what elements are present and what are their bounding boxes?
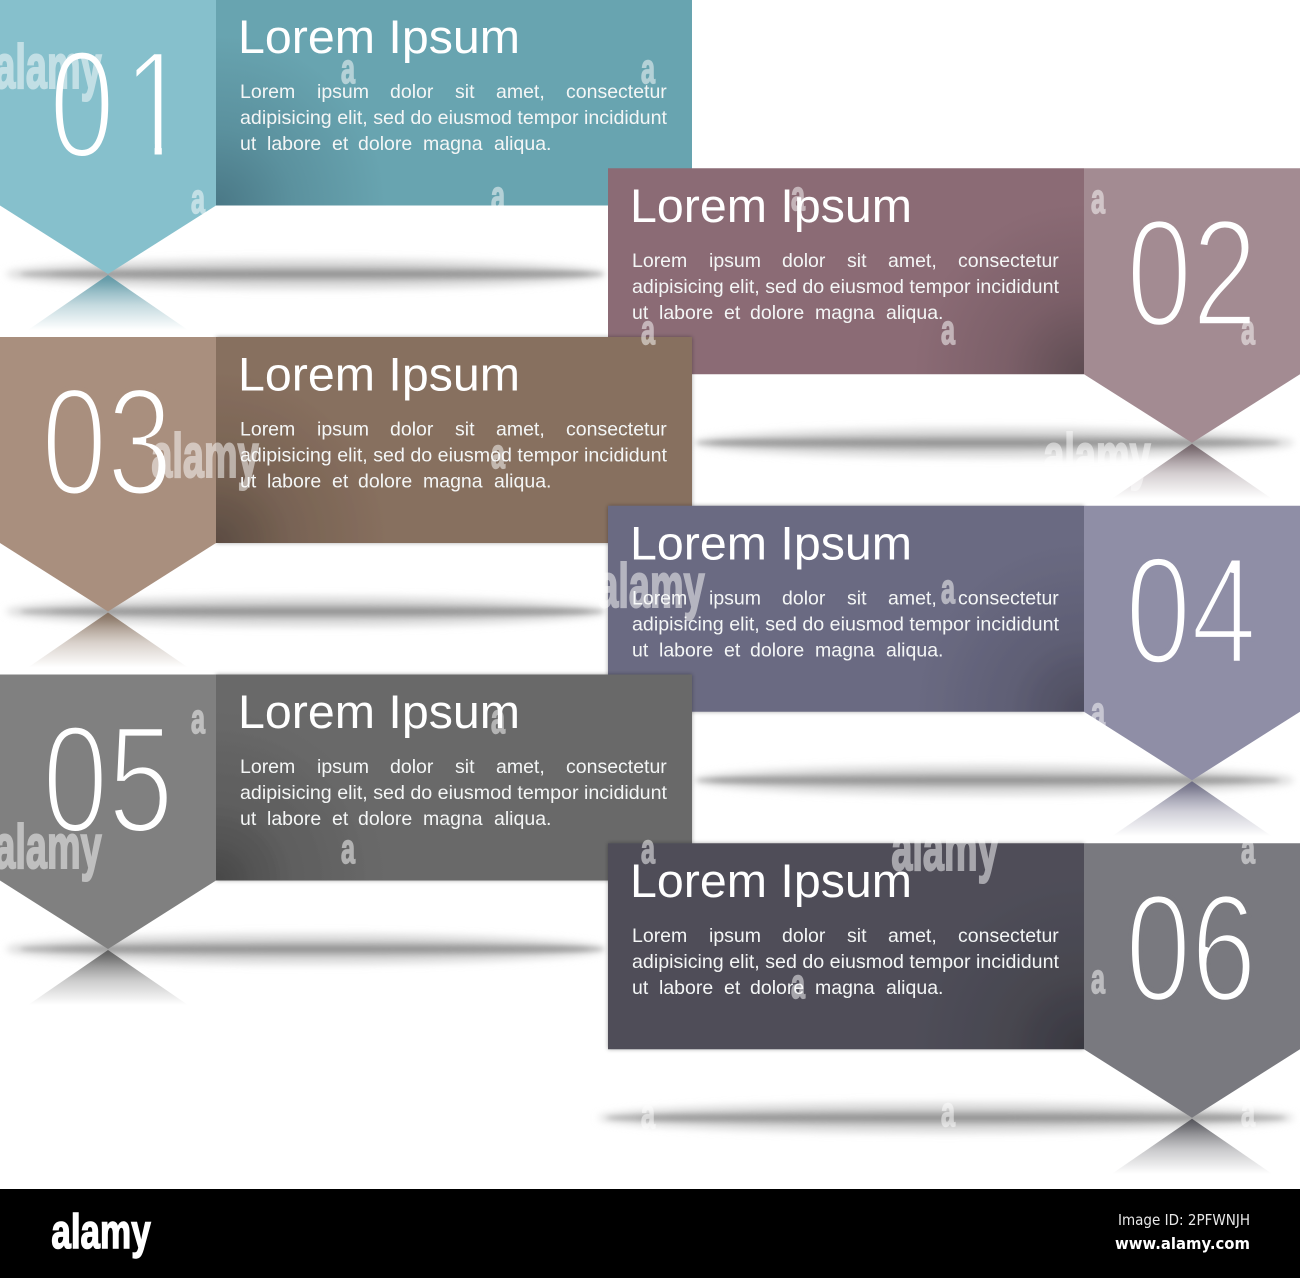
footer logo: alamy	[51, 1205, 151, 1258]
watermarks: small a marks: a	[341, 827, 356, 873]
body text 03: dolore	[358, 470, 412, 492]
watermarks: large alamy: alamy	[891, 814, 999, 883]
text box 02	[608, 168, 1084, 374]
reflection 05	[28, 950, 188, 1005]
arrow ribbon 02	[1084, 168, 1300, 443]
body text 05: labore	[267, 808, 321, 830]
body text 03: et	[332, 470, 349, 492]
arrow ribbon 05	[0, 674, 216, 949]
body text 02: consectetur	[958, 250, 1059, 272]
watermarks: small a marks: a	[491, 174, 506, 220]
reflection 03	[28, 612, 188, 668]
body text 03: Lorem	[240, 418, 295, 440]
watermarks: small a marks: a	[1091, 690, 1106, 736]
body text 02: ipsum	[709, 250, 761, 272]
text box 06	[608, 843, 1084, 1049]
body text 04: Lorem	[632, 587, 687, 609]
body text 06: ipsum	[709, 925, 761, 947]
arrow ribbon 06	[1084, 843, 1300, 1118]
website: www.alamy.com	[1115, 1234, 1250, 1253]
body text 05: magna	[423, 808, 483, 830]
body text 05: amet,	[496, 756, 545, 778]
body text 02: amet,	[888, 250, 937, 272]
reflection 04	[1112, 781, 1272, 836]
body text 05: sit	[455, 756, 475, 778]
watermarks: small a marks: a	[941, 567, 956, 613]
heading 02: Lorem Ipsum	[630, 179, 912, 232]
body text 04: dolor	[782, 587, 826, 609]
body text 06: consectetur	[958, 925, 1059, 947]
number 05: 05	[42, 693, 174, 864]
heading 04: Lorem Ipsum	[630, 516, 912, 569]
body text 06: dolore	[750, 977, 804, 999]
heading 05: Lorem Ipsum	[238, 685, 520, 738]
heading 01: Lorem Ipsum	[238, 10, 520, 63]
watermarks: small a marks: a	[641, 1092, 656, 1138]
body text 03: magna	[423, 470, 483, 492]
text box 04	[608, 506, 1084, 712]
body text 05: ipsum	[317, 756, 369, 778]
body text 04: ipsum	[709, 587, 761, 609]
body text 02: adipisicing elit, sed do eiusmod tempor incididunt	[632, 276, 1060, 298]
watermarks: large alamy: alamy	[597, 551, 705, 620]
watermarks: small a marks: a	[1091, 177, 1106, 223]
watermarks: small a marks: a	[191, 177, 206, 223]
body text 02: Lorem	[632, 250, 687, 272]
body text 01: consectetur	[566, 81, 667, 103]
watermarks: small a marks: a	[641, 47, 656, 93]
watermarks: small a marks	[191, 47, 1256, 1138]
number 06: 06	[1125, 862, 1257, 1033]
text box 01	[216, 0, 692, 206]
number 01: 1	[123, 18, 189, 189]
body text 03: sit	[455, 418, 475, 440]
body text 02: dolore	[750, 302, 804, 324]
floor shadow 01	[6, 259, 606, 289]
panel: item 02	[608, 168, 1300, 499]
body text 06: Lorem	[632, 925, 687, 947]
watermarks: small a marks: a	[1241, 1090, 1256, 1136]
watermarks: small a marks: a	[941, 1090, 956, 1136]
body text 03: labore	[267, 470, 321, 492]
body text 04: amet,	[888, 587, 937, 609]
body text 01: adipisicing elit, sed do eiusmod tempor incididunt	[240, 107, 668, 129]
body text 06: aliqua.	[886, 977, 943, 999]
watermarks: large alamy: alamy	[151, 421, 259, 490]
watermarks: large alamy	[0, 32, 1151, 883]
body text 05: dolor	[390, 756, 434, 778]
panel: item 03	[0, 337, 692, 668]
body text 03: ipsum	[317, 418, 369, 440]
body text 04: magna	[815, 639, 875, 661]
body text 06: sit	[847, 925, 867, 947]
body text 02: aliqua.	[886, 302, 943, 324]
body text 02: labore	[659, 302, 713, 324]
body text 02: et	[724, 302, 741, 324]
body text 01: et	[332, 133, 349, 155]
heading 06: Lorem Ipsum	[630, 854, 912, 907]
arrow ribbon 03	[0, 337, 216, 612]
body text 05: et	[332, 808, 349, 830]
text box 03	[216, 337, 692, 543]
body text 04: sit	[847, 587, 867, 609]
body text 05: Lorem	[240, 756, 295, 778]
body text 04: dolore	[750, 639, 804, 661]
body text 05: aliqua.	[494, 808, 551, 830]
body text 02: dolor	[782, 250, 826, 272]
body text 01: magna	[423, 133, 483, 155]
body text 01: amet,	[496, 81, 545, 103]
body text 04: labore	[659, 639, 713, 661]
floor shadow 02	[694, 428, 1294, 458]
watermarks: small a marks: a	[1241, 308, 1256, 354]
arrow ribbon 04	[1084, 506, 1300, 780]
body text 06: et	[724, 977, 741, 999]
panel: item 04	[608, 506, 1300, 836]
body text 02: sit	[847, 250, 867, 272]
number 04: 04	[1125, 524, 1257, 696]
body text 04: aliqua.	[886, 639, 943, 661]
body text 05: dolore	[358, 808, 412, 830]
body text 02: magna	[815, 302, 875, 324]
watermarks: small a marks: a	[641, 308, 656, 354]
arrow ribbon 01	[0, 0, 216, 274]
floor shadow 06	[598, 1103, 1294, 1133]
body text 06: dolor	[782, 925, 826, 947]
body text 03: consectetur	[566, 418, 667, 440]
reflection 06	[1112, 1119, 1272, 1174]
body text 06: amet,	[888, 925, 937, 947]
body text 06: adipisicing elit, sed do eiusmod tempor incididunt	[632, 951, 1060, 973]
body text 04: adipisicing elit, sed do eiusmod tempor incididunt	[632, 613, 1060, 635]
floor shadow 04	[694, 765, 1294, 795]
image id: Image ID: 2PFWNJH	[1118, 1211, 1250, 1229]
watermarks: small a marks: a	[1091, 957, 1106, 1003]
panel: item 05	[0, 674, 692, 1005]
body text 01: dolor	[390, 81, 434, 103]
body text 03: ut	[240, 470, 257, 492]
body text 01: sit	[455, 81, 475, 103]
footer bar	[0, 1189, 1300, 1278]
watermarks: large alamy: alamy	[1043, 421, 1151, 490]
reflection 02	[1112, 444, 1272, 499]
number 01	[49, 18, 192, 189]
watermarks: small a marks: a	[941, 308, 956, 354]
watermarks: small a marks: a	[341, 47, 356, 93]
body text 03: dolor	[390, 418, 434, 440]
body text 01: dolore	[358, 133, 412, 155]
body text 03: adipisicing elit, sed do eiusmod tempor incididunt	[240, 444, 668, 466]
body text 01: labore	[267, 133, 321, 155]
number 03: 03	[41, 356, 173, 527]
body text 01: ut	[240, 133, 257, 155]
body text 01: aliqua.	[494, 133, 551, 155]
reflection 01	[28, 275, 188, 330]
body text 01: ipsum	[317, 81, 369, 103]
watermarks: small a marks: a	[491, 697, 506, 743]
panel: item 01	[0, 0, 692, 330]
number 01: 0	[49, 18, 115, 189]
floor shadow 05	[6, 934, 606, 964]
body text 02: ut	[632, 302, 649, 324]
body text 06: labore	[659, 977, 713, 999]
body text 05: ut	[240, 808, 257, 830]
body text 04: et	[724, 639, 741, 661]
floor shadow 03	[6, 596, 606, 626]
watermarks: small a marks: a	[191, 697, 206, 743]
body text 04: consectetur	[958, 587, 1059, 609]
watermarks: small a marks: a	[641, 827, 656, 873]
watermarks: small a marks: a	[791, 174, 806, 220]
body text 05: adipisicing elit, sed do eiusmod tempor incididunt	[240, 782, 668, 804]
heading 03: Lorem Ipsum	[238, 348, 520, 400]
watermarks: small a marks: a	[491, 432, 506, 478]
body text 05: consectetur	[566, 756, 667, 778]
body text 04: ut	[632, 639, 649, 661]
body text 06: ut	[632, 977, 649, 999]
watermarks: small a marks: a	[1241, 827, 1256, 873]
body text 03: aliqua.	[494, 470, 551, 492]
body text 03: amet,	[496, 418, 545, 440]
watermarks: small a marks: a	[791, 962, 806, 1008]
text box 05	[216, 674, 692, 880]
panel: item 06	[598, 843, 1300, 1174]
number 02: 02	[1126, 187, 1258, 358]
body text 01: Lorem	[240, 81, 295, 103]
body text 06: magna	[815, 977, 875, 999]
